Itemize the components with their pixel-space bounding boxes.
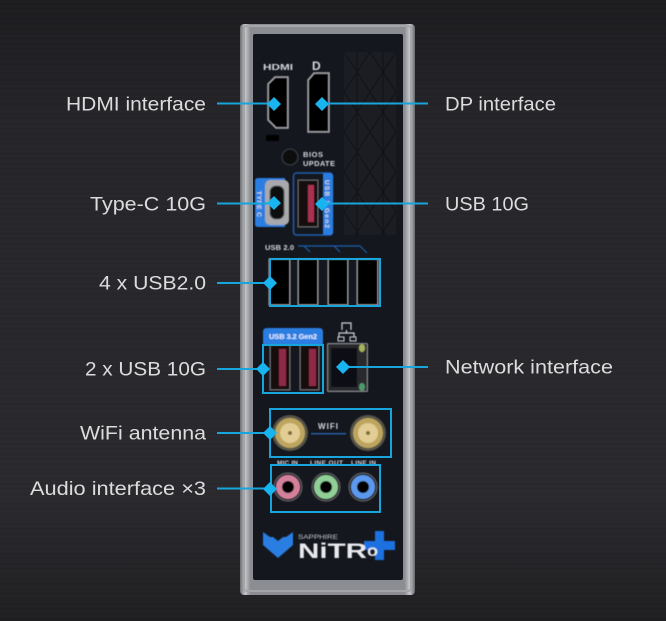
Sapphire Nitro+ logo <box>263 531 395 563</box>
callout: USB 10G: USB 10G <box>445 194 529 216</box>
WiFi antenna connectors <box>272 415 386 451</box>
Sapphire Nitro+ logo: SAPPHIRE <box>298 534 339 541</box>
callout: Type-C 10G <box>90 194 281 216</box>
callout: 2 x USB 10G: 2 x USB 10G <box>85 358 206 380</box>
WiFi antenna connectors: WIFI <box>318 422 338 431</box>
callout: DP interface: DP interface <box>445 94 556 116</box>
callout: USB 10G <box>315 194 529 216</box>
audio jacks: MIC IN <box>277 460 298 467</box>
Sapphire Nitro+ logo: o <box>367 543 378 560</box>
BIOS update button: UPDATE <box>303 159 335 168</box>
callout: Type-C 10G: Type-C 10G <box>90 194 206 216</box>
USB 3.2 Gen2 ports: USB 3.2 Gen2 <box>269 332 317 341</box>
USB 2.0 ports <box>265 243 378 305</box>
Sapphire Nitro+ logo: NiTR <box>298 540 367 563</box>
USB 3.2 Gen2 ports <box>263 328 323 390</box>
HDMI port <box>263 63 293 141</box>
DP port: D <box>312 59 321 73</box>
Type-C port: TYPE C <box>255 191 262 217</box>
callout: WiFi antenna: WiFi antenna <box>80 422 206 444</box>
Type-C port <box>255 178 289 227</box>
callout: Network interface: Network interface <box>445 356 613 378</box>
network port <box>328 323 368 392</box>
callout: HDMI interface: HDMI interface <box>66 94 206 116</box>
HDMI port: HDMI <box>263 63 293 72</box>
callout: WiFi antenna <box>80 409 391 457</box>
audio jacks: LINE OUT <box>310 460 343 467</box>
USB 10G port <box>294 173 333 235</box>
callout: 2 x USB 10G <box>85 345 323 393</box>
BIOS update button: BIOS <box>303 150 323 159</box>
USB 2.0 ports: USB 2.0 <box>265 243 294 252</box>
USB 10G port: USB 3 Gen2 <box>323 180 330 228</box>
callout: Audio interface x3: Audio interface ×3 <box>30 478 206 500</box>
metal IO shield plate <box>240 24 415 595</box>
mesh texture panel <box>344 52 396 235</box>
DP port <box>308 59 329 132</box>
callout: HDMI interface <box>66 94 281 116</box>
callout: Network interface <box>336 356 613 378</box>
audio jacks <box>274 460 377 501</box>
BIOS update button <box>282 149 335 168</box>
callout: DP interface <box>315 94 556 116</box>
callout: Audio interface x3 <box>30 465 380 512</box>
audio jacks: LINE IN <box>351 460 376 467</box>
callout: 4 x USB2.0: 4 x USB2.0 <box>99 272 206 294</box>
callout: 4 x USB2.0 <box>99 259 380 306</box>
